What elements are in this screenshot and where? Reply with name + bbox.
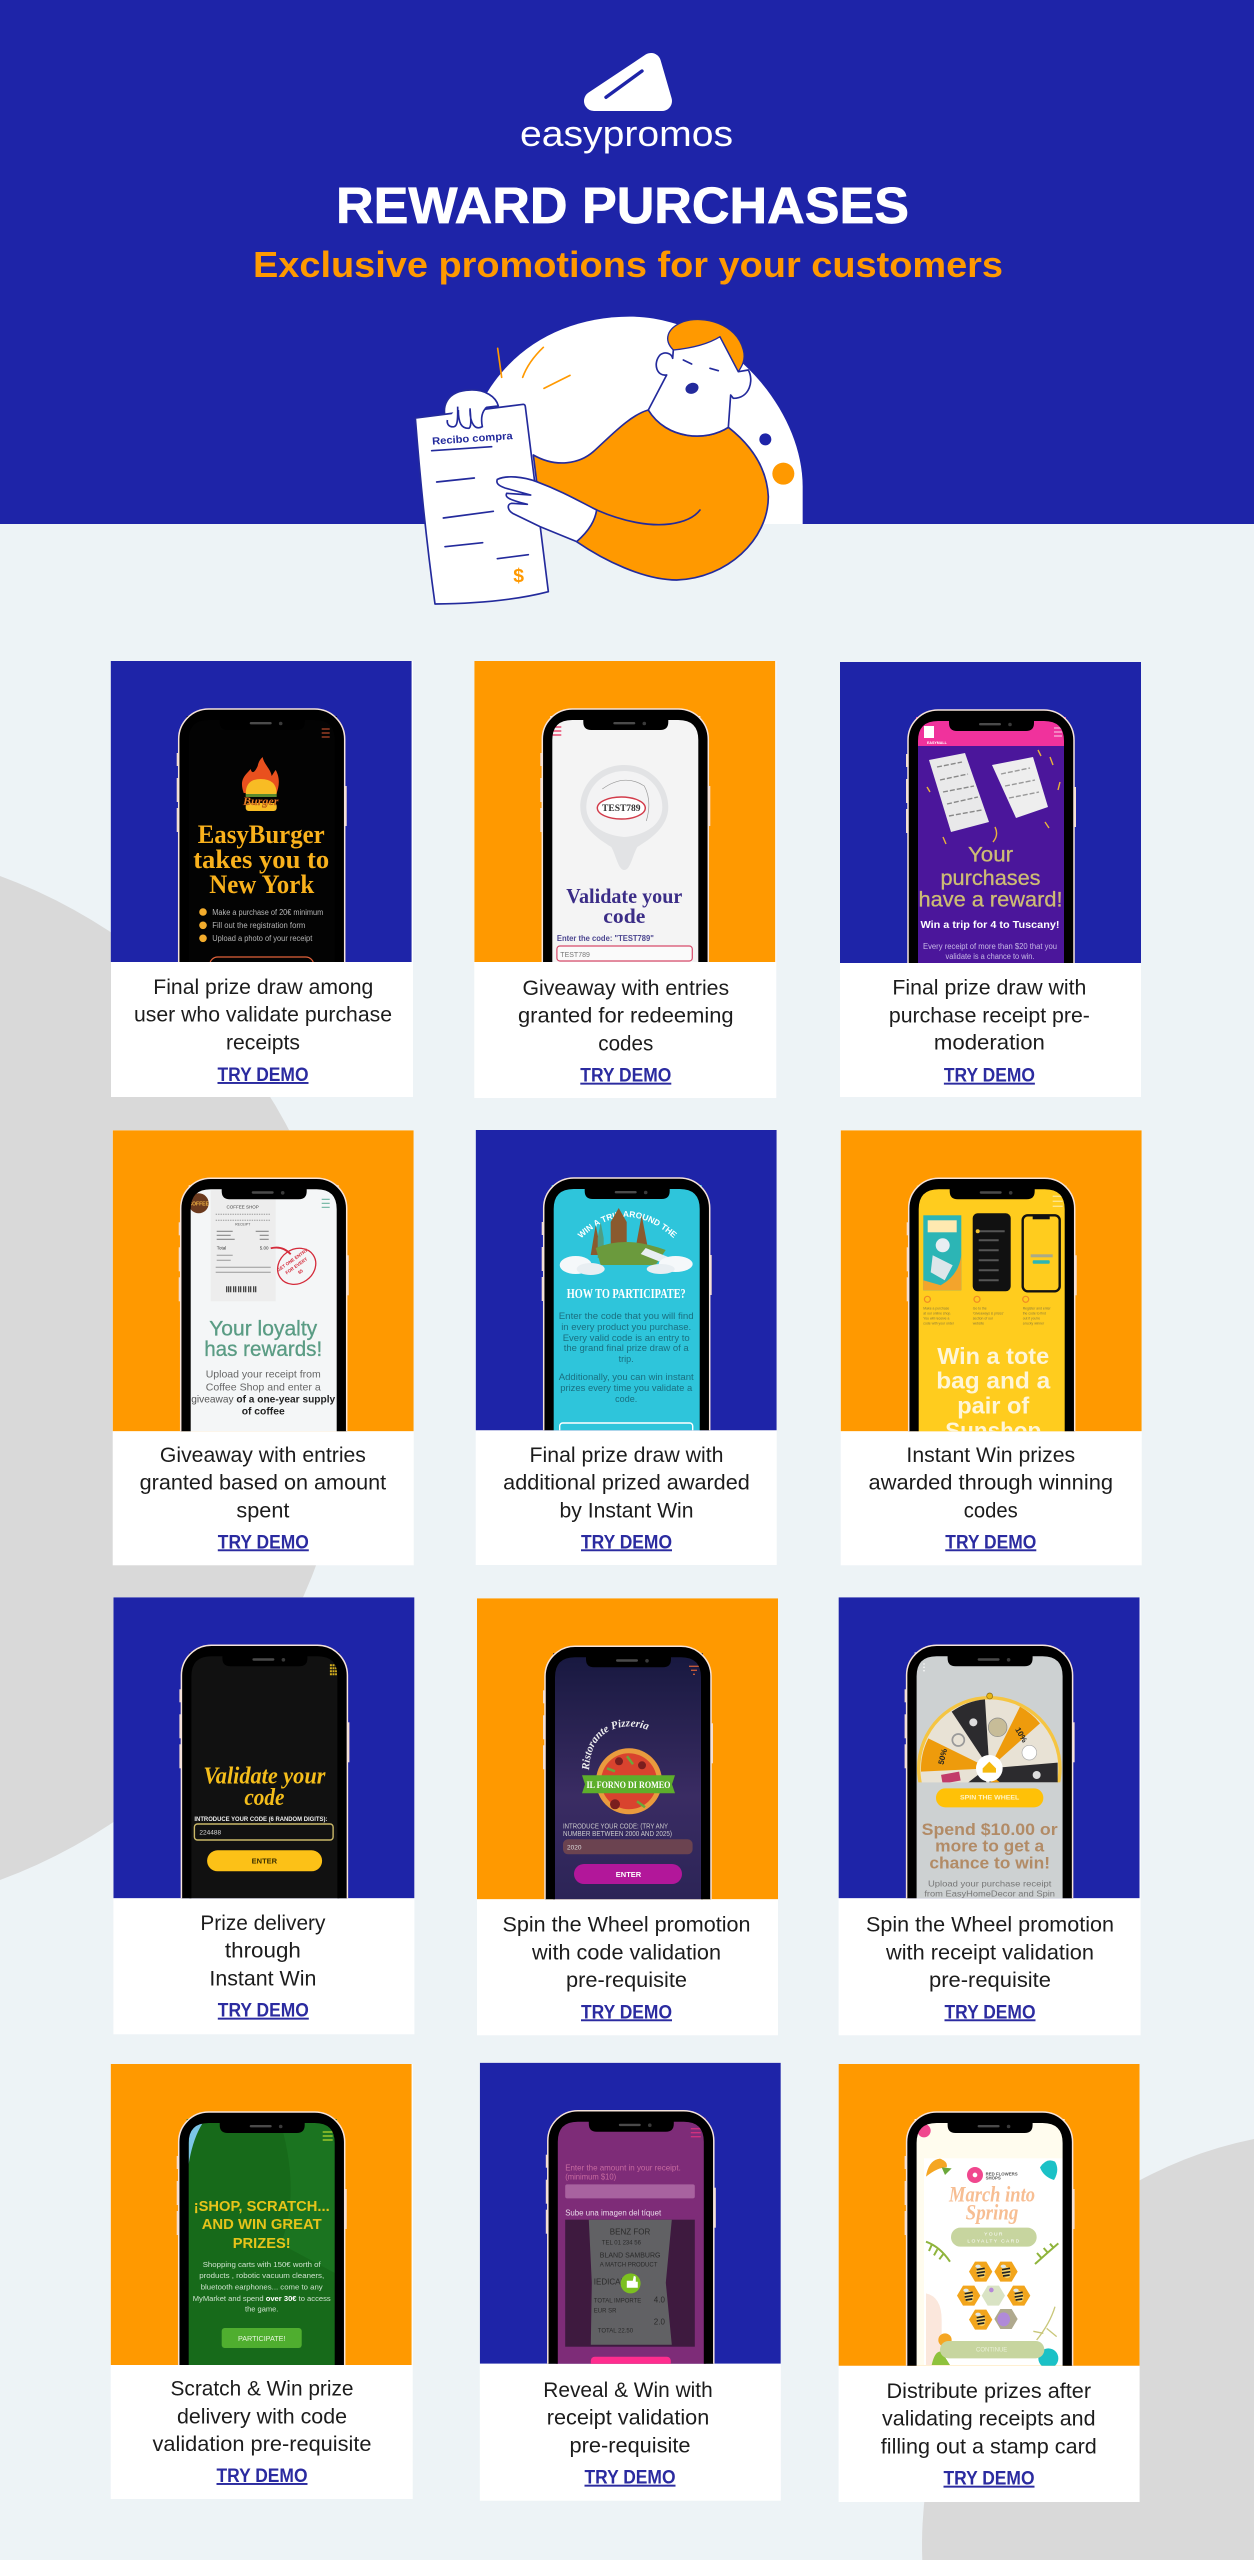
caption: moderation	[934, 1032, 1045, 1055]
phone image: spin the wheel receipt: Spend $10.00 or	[922, 1820, 1058, 1839]
instructions	[559, 1311, 694, 1404]
landmarks illustration	[560, 1208, 693, 1275]
instructions: trip.	[619, 1354, 634, 1364]
card 8	[477, 1598, 778, 2036]
icon: burger logo: Burger	[242, 794, 279, 808]
description: MyMarket and spend over 30€ to access	[193, 2294, 331, 2303]
try demo link: TRY DEMO	[218, 1064, 308, 1086]
phone image: reveal and win	[480, 2062, 781, 2364]
card panel	[113, 1597, 414, 2034]
instructions: the grand final prize draw of a	[564, 1343, 689, 1353]
receipt photo: 4.0	[654, 2296, 665, 2305]
card 10	[111, 2064, 413, 2499]
phone image: coffee loyalty: has rewards!	[204, 1338, 322, 1361]
receipt photo: TOTAL 22.50	[598, 2329, 634, 2335]
try demo link: TRY DEMO	[584, 2467, 676, 2489]
caption	[200, 1912, 326, 1990]
phone image: coffee loyalty: COFFEE	[189, 1201, 210, 1207]
receipt	[211, 1190, 276, 1301]
loyalty card pill	[951, 2228, 1037, 2247]
phone image: validate your code dark: Validate your	[203, 1763, 326, 1789]
caption: validation pre-requisite	[152, 2433, 372, 2456]
card 7	[113, 1597, 414, 2034]
caption: Distribute prizes after	[887, 2380, 1091, 2403]
instructions: Every valid code is an entry to	[563, 1333, 690, 1343]
mini screen 2	[973, 1213, 1011, 1291]
numbered steps: section of our	[973, 1316, 994, 1320]
phone image: win a trip around the world	[476, 1130, 777, 1430]
caption	[543, 2379, 713, 2457]
card panel	[113, 1130, 414, 1565]
phone image: il forno di romeo: 2020	[567, 1844, 582, 1851]
phone image: spin the wheel receipt: more to get a	[935, 1837, 1045, 1856]
phone image: spin the wheel receipt: from EasyHomeDecor and Spin	[924, 1889, 1055, 1899]
flowers and leaves: RED FLOWERS	[986, 2172, 1018, 2177]
numbered steps: a lucky winner	[1023, 1321, 1045, 1325]
phone image: il forno di romeo	[477, 1598, 778, 1900]
card 5	[476, 1130, 777, 1565]
flowers and leaves	[917, 2124, 1058, 2368]
receipt: COFFEE SHOP	[227, 1204, 259, 1209]
instructions: in every product you purchase.	[561, 1322, 691, 1332]
phone image: win a tote bag	[840, 1130, 1142, 1443]
phone image: your purchases have a reward: Every receipt of more than $20 that you	[923, 942, 1057, 951]
caption: spent	[236, 1499, 290, 1522]
icon: burger logo	[242, 757, 279, 811]
phone image: coffee loyalty: Upload your receipt from	[206, 1368, 321, 1380]
try demo link: TRY DEMO	[218, 1531, 309, 1553]
phone image: win a tote bag: Sunshop	[945, 1417, 1041, 1443]
phone image: win a tote bag: bag and a	[936, 1367, 1050, 1393]
title: REWARD PURCHASES	[336, 177, 909, 234]
caption: Final prize draw with	[892, 977, 1086, 1000]
caption: Reveal & Win with	[543, 2379, 713, 2402]
mini screen 1	[923, 1215, 961, 1290]
caption	[518, 977, 734, 1055]
receipt title: Recibo compra	[432, 431, 513, 448]
phone image: your purchases have a reward: Win a trip for 4 to Tuscany!	[920, 920, 1060, 931]
phone image: shop scratch win: ¡SHOP, SCRATCH...	[194, 2199, 330, 2215]
phone image: win a tote bag: Win a tote	[937, 1343, 1049, 1369]
receipt photo: EUR SR	[594, 2309, 617, 2315]
receipt photo: TOTAL IMPORTE	[594, 2299, 641, 2305]
arc text	[578, 1217, 678, 1242]
phone image: your purchases have a reward: purchases	[940, 867, 1040, 890]
caption: receipt validation	[547, 2407, 709, 2430]
caption: Final prize draw among	[153, 976, 373, 999]
card panel	[111, 2064, 413, 2499]
stamp: one entry	[271, 1241, 323, 1292]
phone image: validate your code dark: 224488	[199, 1829, 221, 1836]
continue pill	[940, 2341, 1044, 2358]
icon: pizza: IL FORNO DI ROMEO	[586, 1780, 670, 1790]
numbered steps: code with your order	[923, 1321, 955, 1325]
caption: user who validate purchase	[134, 1004, 392, 1027]
caption: additional prized awarded	[503, 1472, 750, 1495]
caption: Instant Win	[209, 1967, 316, 1990]
phone image: march into spring stamp card: March into	[948, 2182, 1035, 2207]
try demo link: TRY DEMO	[944, 2001, 1036, 2023]
caption	[889, 977, 1090, 1055]
stamp: one entry: FOR EVERY	[284, 1256, 308, 1275]
description: Shopping carts with 150€ worth of	[203, 2260, 322, 2269]
caption	[866, 1914, 1114, 1992]
phone image: your purchases have a reward: Your	[968, 844, 1013, 867]
phone image: validate your code dark: INTRODUCE YOUR CODE (6 RANDOM DIGITS):	[194, 1816, 327, 1823]
phone image: shop scratch win: PRIZES!	[233, 2236, 291, 2252]
caption	[881, 2380, 1097, 2458]
phone image: EasyBurger: New York	[209, 870, 315, 899]
phone image: coffee loyalty: Coffee Shop and enter a	[206, 1381, 321, 1393]
phone image: coffee loyalty: Your loyalty	[209, 1317, 318, 1340]
caption: Spin the Wheel promotion	[866, 1914, 1114, 1937]
phone image: validate your code: Enter the code: "TEST789"	[557, 934, 654, 943]
phone image: validate your code: TEST789	[560, 952, 590, 959]
try demo link: TRY DEMO	[580, 1065, 671, 1087]
try demo link: TRY DEMO	[944, 2468, 1034, 2490]
stamp: one entry: $5	[297, 1268, 304, 1275]
caption: granted for redeeming	[518, 1005, 734, 1028]
receipt photo: BLAND SAMBURG	[600, 2253, 660, 2260]
instructions: Additionally, you can win instant	[559, 1372, 694, 1382]
phone image: spin the wheel receipt: SPIN THE WHEEL	[960, 1796, 1020, 1802]
phone image: shop scratch win: AND WIN GREAT	[202, 2217, 322, 2233]
phone image: shop scratch win	[110, 2064, 412, 2365]
numbered steps: Register and enter	[1023, 1306, 1051, 1310]
card panel	[841, 1130, 1142, 1565]
instructions: Enter the code that you will find	[559, 1311, 694, 1321]
spin wheel	[917, 1696, 1062, 1782]
stamp: one entry: GET ONE ENTRY	[276, 1248, 309, 1273]
logo: easypromos	[520, 63, 733, 154]
card 6	[841, 1130, 1142, 1565]
caption	[502, 1914, 750, 1992]
caption: pre-requisite	[566, 1969, 687, 1992]
caption: Prize delivery	[200, 1912, 326, 1935]
illustration: man holding receipt	[415, 317, 803, 604]
try demo link: TRY DEMO	[944, 1065, 1035, 1087]
numbered steps: You will receive a	[923, 1316, 949, 1320]
caption: receipts	[226, 1031, 300, 1054]
phone image: your purchases have a reward: EASYMALL	[927, 741, 948, 745]
receipt: RECEIPT	[235, 1222, 251, 1226]
phone image: validate your code: code	[603, 904, 645, 928]
numbered steps: the code to find	[1023, 1311, 1046, 1315]
arc script title	[589, 1726, 673, 1776]
caption: through	[225, 1940, 301, 1963]
flowers and leaves: SHOPS	[986, 2175, 1001, 2180]
phone image: march into spring stamp card: YOUR	[984, 2232, 1004, 2238]
card 4	[113, 1130, 414, 1565]
phone image: validate your code dark: code	[244, 1785, 285, 1811]
header band	[0, 0, 1254, 524]
card 1	[111, 661, 413, 1097]
try demo link: TRY DEMO	[218, 2000, 309, 2022]
phone image: reveal and win: (minimum $10)	[565, 2172, 616, 2182]
caption	[869, 1444, 1113, 1522]
phone image: march into spring stamp card: CONTINUE	[976, 2348, 1007, 2354]
spin wheel: 50%	[937, 1748, 949, 1765]
icon: menu grid	[330, 1665, 337, 1674]
card 3	[840, 662, 1141, 1097]
caption: pre-requisite	[570, 2434, 690, 2457]
phone image: il forno di romeo: INTRODUCE YOUR CODE: (TRY ANY	[563, 1823, 668, 1830]
caption	[140, 1444, 386, 1522]
phone image: validate your code	[474, 661, 776, 962]
phone image: EasyBurger: takes you to	[193, 845, 329, 874]
caption: with receipt validation	[885, 1941, 1094, 1964]
description: bluetooth earphones... come to any	[201, 2282, 323, 2291]
card panel	[840, 662, 1141, 1097]
phone image: il forno di romeo: NUMBER BETWEEN 2000 AND 2025)	[563, 1831, 672, 1838]
phone image: EasyBurger	[110, 661, 412, 962]
card 12	[839, 2064, 1140, 2502]
phone image: EasyBurger: Make a purchase of 20€ minimum	[212, 908, 324, 917]
phone image: march into spring stamp card: Spring	[966, 2199, 1018, 2224]
phone image: reveal and win: Enter the amount in your receipt.	[565, 2163, 681, 2173]
stamps	[957, 2262, 1030, 2330]
icon: plate with code: TEST789	[602, 804, 641, 814]
phone image: spin the wheel receipt	[838, 1597, 1140, 1899]
numbered steps: out if you're	[1023, 1316, 1040, 1320]
numbered steps: 'Giveaways & prizes'	[973, 1311, 1004, 1315]
caption	[503, 1444, 750, 1522]
numbered steps	[923, 1296, 1051, 1325]
phone image: coffee loyalty: of coffee	[242, 1405, 285, 1417]
instructions: prizes every time you validate a	[560, 1383, 692, 1393]
receipt photo: BENZ FOR	[610, 2228, 650, 2237]
phone image: validate your code: Validate your	[566, 884, 682, 908]
caption: codes	[598, 1032, 653, 1055]
caption: filling out a stamp card	[881, 2435, 1097, 2458]
caption: Giveaway with entries	[160, 1444, 366, 1467]
phone image: reveal and win: Sube una imagen del tíquet	[565, 2209, 662, 2218]
caption: validating receipts and	[882, 2408, 1096, 2431]
try demo link: TRY DEMO	[945, 1531, 1036, 1553]
phone image: EasyBurger: Fill out the registration form	[212, 921, 306, 930]
try demo link: TRY DEMO	[216, 2465, 308, 2487]
receipts	[927, 750, 1060, 844]
caption: Giveaway with entries	[522, 977, 729, 1000]
try demo link: TRY DEMO	[581, 2001, 672, 2023]
receipt: Total	[217, 1245, 226, 1250]
phone image: il forno di romeo: Ristorante Pizzeria	[582, 1720, 649, 1770]
phone image: win a tote bag: pair of	[957, 1392, 1030, 1418]
numbered steps: Make a purchase	[923, 1306, 949, 1310]
caption: Final prize draw with	[530, 1444, 724, 1467]
instructions: code.	[615, 1394, 637, 1404]
phone image: coffee loyalty	[112, 1130, 414, 1432]
phone image: shop scratch win: PARTICIPATE!	[238, 2334, 285, 2343]
subtitle: Exclusive promotions for your customers	[253, 244, 1003, 285]
card panel	[474, 661, 776, 1098]
phone image: coffee loyalty: giveaway of a one-year supply	[191, 1393, 335, 1405]
caption: by Instant Win	[560, 1499, 694, 1522]
caption: codes	[964, 1499, 1018, 1522]
spin wheel: 10%	[1013, 1726, 1029, 1744]
phone image: EasyBurger: EasyBurger	[198, 820, 325, 849]
caption: pre-requisite	[929, 1969, 1051, 1992]
phone image: win a trip around the world: WIN A TRIP AROUND THE WORLD	[577, 1211, 678, 1238]
phone image: il forno di romeo: ENTER	[616, 1870, 642, 1879]
card panel	[111, 661, 413, 1097]
icon: shop logo	[924, 726, 934, 738]
caption: purchase receipt pre-	[889, 1004, 1090, 1027]
caption: granted based on amount	[140, 1472, 386, 1495]
phone image: your purchases have a reward	[840, 662, 1141, 963]
try demo link: TRY DEMO	[581, 1531, 672, 1553]
receipt photo: 2.0	[654, 2318, 665, 2327]
icon: triangle logo mark	[594, 63, 662, 101]
caption	[134, 976, 392, 1054]
decorative grey circle left	[0, 876, 350, 1880]
receipt: 5.00	[260, 1245, 269, 1250]
numbered steps: at our online shop.	[923, 1311, 951, 1315]
mini screen 3	[1023, 1215, 1060, 1291]
phone image: win a trip around the world: HOW TO PARTICIPATE?	[567, 1287, 686, 1302]
caption: with code validation	[531, 1941, 721, 1964]
numbered steps: Go to the	[973, 1306, 987, 1310]
receipt photo: IEDICAR	[594, 2278, 626, 2287]
receipt photo	[565, 2220, 695, 2347]
caption: Scratch & Win prize	[170, 2378, 354, 2401]
phone image: your purchases have a reward: have a reward!	[918, 889, 1062, 912]
spin button	[936, 1788, 1043, 1807]
phone image: spin the wheel receipt: Upload your purchase receipt	[928, 1879, 1052, 1889]
description	[193, 2260, 331, 2314]
card panel	[839, 2064, 1140, 2502]
description: products , robotic vacuum cleaners,	[199, 2271, 324, 2280]
phone image: EasyBurger: Upload a photo of your receipt	[212, 934, 313, 943]
card 9	[839, 1597, 1141, 2035]
phone image: validate your code dark: ENTER	[252, 1857, 278, 1866]
caption	[152, 2378, 372, 2456]
phone image: validate your code dark	[113, 1597, 414, 1898]
card 2	[474, 661, 776, 1098]
icon: pizza	[582, 1748, 675, 1814]
icon: plate with code	[580, 765, 668, 870]
phone image: your purchases have a reward: validate is a chance to win.	[946, 952, 1034, 961]
logo wordmark: easypromos	[520, 113, 733, 154]
caption: delivery with code	[177, 2405, 347, 2428]
receipt photo: A MATCH PRODUCT	[600, 2263, 658, 2269]
decorative grey circle bottom right	[922, 2139, 1254, 2560]
phone image: march into spring stamp card	[838, 2064, 1140, 2366]
receipt dollar sign: $	[513, 566, 524, 587]
card panel	[477, 1598, 778, 2035]
card panel	[476, 1130, 777, 1565]
caption: Instant Win prizes	[906, 1444, 1075, 1467]
phone image: spin the wheel receipt: chance to win!	[929, 1853, 1050, 1872]
card panel	[480, 2063, 781, 2501]
numbered steps: website	[973, 1321, 984, 1325]
receipt photo: TEL 01 234 56	[602, 2241, 642, 2247]
caption: awarded through winning	[869, 1472, 1113, 1495]
caption: Spin the Wheel promotion	[502, 1914, 750, 1937]
icon: coffee logo	[189, 1193, 209, 1213]
phone image: march into spring stamp card: LOYALTY CARD	[967, 2238, 1021, 2244]
description: the game.	[245, 2305, 278, 2314]
card panel	[839, 1597, 1141, 2035]
card 11	[480, 2063, 781, 2501]
